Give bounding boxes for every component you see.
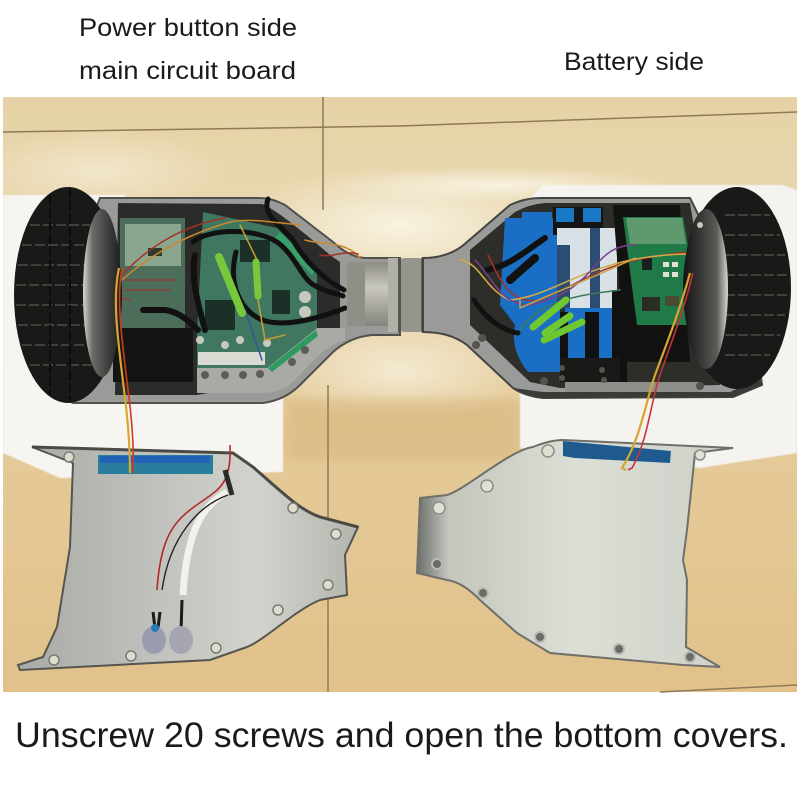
main circuit board xyxy=(197,212,317,368)
left cavity xyxy=(115,203,340,395)
centre axle xyxy=(347,258,470,332)
wires left xyxy=(110,199,360,360)
wires right xyxy=(460,238,690,340)
blue strip xyxy=(98,455,213,474)
black motor block xyxy=(113,328,193,382)
photo background: floor tiles xyxy=(0,97,797,692)
left yellow-red harness xyxy=(116,268,133,473)
small board xyxy=(120,218,185,328)
hoverboard body right half xyxy=(423,198,762,398)
right yellow-red harness xyxy=(622,273,693,470)
caption: Unscrew 20 screws and open the bottom covers. xyxy=(15,716,788,755)
screw posts xyxy=(49,452,341,665)
heading: power button side: Power button side xyxy=(79,14,297,42)
photo: opened hoverboard on tiled floor xyxy=(0,97,797,692)
right wheel xyxy=(683,187,791,389)
battery xyxy=(500,218,560,372)
heading: main circuit board: main circuit board xyxy=(79,57,296,85)
right PCB xyxy=(623,217,702,325)
sleeved wire and capacitors xyxy=(183,492,227,595)
right shell xyxy=(423,198,762,398)
foam block left xyxy=(3,195,283,478)
foam block right xyxy=(520,185,797,468)
left shell xyxy=(40,198,400,403)
right bottom cover xyxy=(417,440,733,667)
black motor block xyxy=(613,205,690,362)
silver lower strip with screws xyxy=(197,328,345,393)
hoverboard body left half xyxy=(40,198,400,403)
right cavity xyxy=(470,203,720,388)
screw posts xyxy=(433,445,705,514)
silver bottom floor xyxy=(565,382,700,392)
heading: battery side: Battery side xyxy=(564,48,704,76)
left bottom cover xyxy=(18,445,358,670)
left wheel xyxy=(14,187,122,403)
